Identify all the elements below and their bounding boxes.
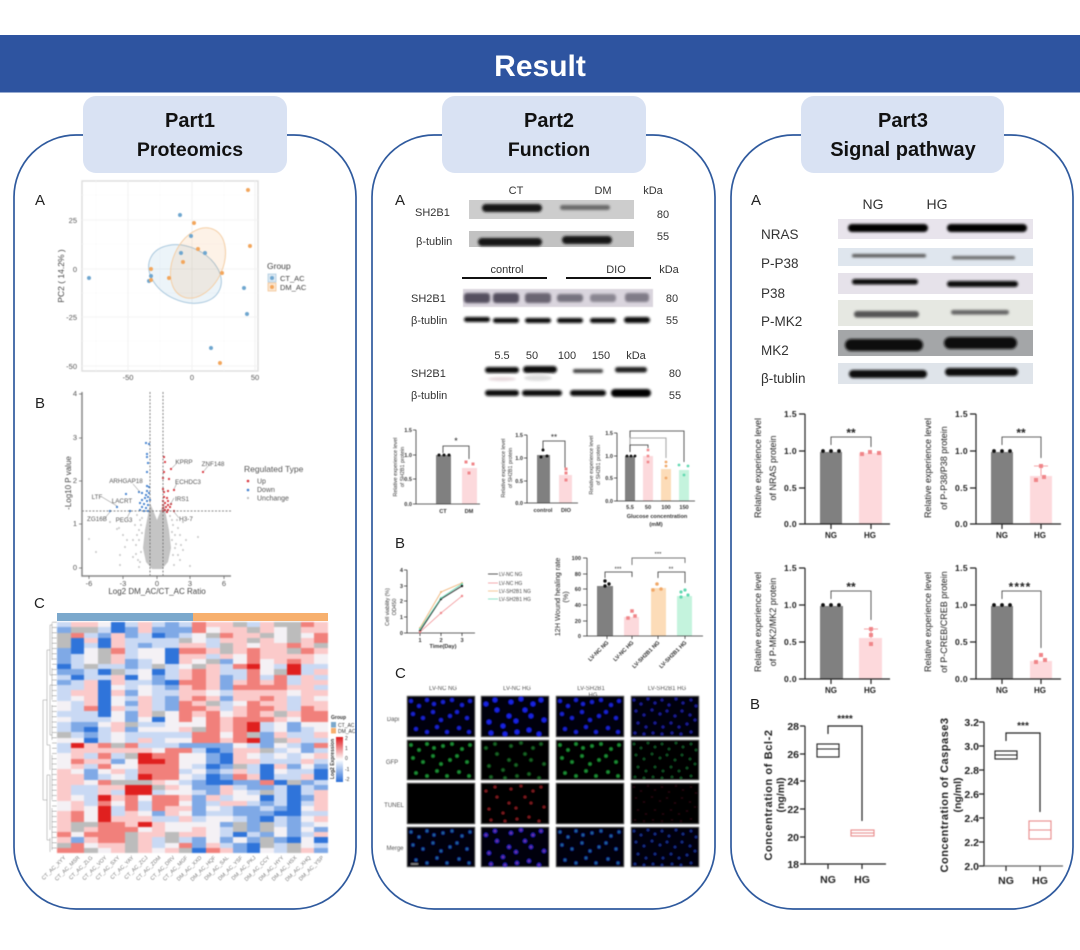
bar chart: SH2B1 glucose concentration: 0.0 [605,499,613,505]
label: Part1 A: A [35,192,45,209]
bar chart: wound healing rate: LV-NC NG [588,640,610,663]
heatmap sample labels: DM_AC_HQF [190,855,218,883]
line chart: cell viability: 2 [400,599,403,605]
heatmap sample labels: DM_AC_CCY [244,855,272,883]
box chart: Caspase3 concentration: 2.4 [964,813,979,825]
western blot: control vs DIO: 55 [666,315,678,327]
bar chart: P-P38/P38 protein: 1.0 [955,446,968,456]
bar chart: NRAS protein: of NRAS protein [768,435,778,501]
label: Part2 B: B [395,535,405,552]
bar chart: SH2B1 control vs DIO: 0.5 [515,479,523,485]
heatmap sample labels: CT_AC_DRV [150,855,177,882]
volcano plot: LACRT [112,498,132,505]
PCA scatter plot: PC2 ( 14.2% ) [56,249,66,303]
bar chart: P-P38/P38 protein: NG [996,531,1008,540]
western blots: pathway proteins: P-P38 [761,256,799,271]
bar chart: SH2B1 glucose concentration: 150 [679,505,689,511]
volcano plot: PEG3 [116,517,133,524]
title banner [0,35,1080,92]
bar chart: P-MK2/MK2 protein: NG [825,686,837,695]
fluorescence column labels: LV-NC HG [503,686,531,692]
western blots: pathway proteins [761,196,1033,386]
bar chart: SH2B1 CT vs DM: of SH2B1 protein [400,447,406,487]
box chart: Bcl-2 concentration: **** [837,714,853,725]
bar chart: wound healing rate: 0 [578,634,581,640]
heatmap sample labels: DM_AC_XHQ [284,855,312,883]
box chart: Bcl-2 concentration: 18 [787,859,799,871]
bar chart: SH2B1 glucose concentration: 1.0 [605,454,613,460]
heading: Part3 Signal pathway: Part3 [878,110,928,132]
label: Part1 C: C [34,595,45,612]
bar chart: wound healing rate: 40 [575,603,581,609]
bar chart: NRAS protein: 1.5 [784,409,797,419]
line chart: cell viability: 4 [400,568,404,574]
bar chart: P-MK2/MK2 protein: 1.0 [784,600,797,610]
bar chart: P-MK2/MK2 protein: HG [864,686,876,695]
bar chart: NRAS protein: 0.0 [784,519,797,529]
volcano plot: -6 [86,579,92,588]
bar chart: wound healing rate: ** [669,567,674,573]
western blot: control vs DIO: control [490,264,524,276]
box chart: Caspase3 concentration: 3.0 [964,741,979,753]
line chart: cell viability: 3 [400,584,403,590]
bar chart: P-MK2/MK2 protein: 0.0 [784,674,797,684]
bar chart: wound healing rate: LV-SH2B1 HG [659,640,688,670]
heatmap sample labels: CT_AC_XYY [41,855,68,882]
bar chart: P-P38/P38 protein: HG [1034,531,1046,540]
western blot: glucose gradient: 5.5 [494,350,510,362]
western blot: CT vs DM: CT [509,185,524,197]
western blot: glucose gradient: SH2B1 [411,368,446,380]
bar chart: SH2B1 control vs DIO: of SH2B1 protein [508,448,514,488]
western blots: pathway proteins: P38 [761,286,785,301]
bar chart: P-MK2/MK2 protein [753,563,890,695]
bar chart: NRAS protein: NG [825,531,837,540]
western blot: control vs DIO: kDa [659,264,680,276]
western blots: pathway proteins: NG [862,196,884,212]
box chart: Bcl-2 concentration: 28 [787,721,799,733]
line chart: cell viability: Cell viability (%) [385,588,391,626]
heading: Part2 Function: Function [508,139,590,161]
western blot: glucose gradient: kDa [626,350,647,362]
PCA scatter plot: Group [267,261,291,271]
heatmap cells [56,621,329,854]
volcano plot: LTF [92,494,103,501]
PCA scatter plot: -25 [66,313,77,322]
volcano plot: Unchange [257,496,289,502]
label: Part1 B: B [35,395,45,412]
bar chart: SH2B1 CT vs DM: CT [439,509,447,515]
box chart: Bcl-2 concentration: 24 [787,776,799,788]
fluorescence row labels: TUNEL [384,803,404,809]
bar chart: SH2B1 control vs DIO: control [534,508,553,514]
fluorescence row labels: GFP [386,760,398,766]
bar chart: wound healing rate: 12H Wound healing rate [553,558,562,636]
fluorescence column labels: LV-SH2B1 [577,686,605,692]
bar chart: SH2B1 CT vs DM: 0.5 [404,477,412,483]
western blots: pathway proteins: P-MK2 [761,314,802,329]
western blot: glucose gradient: 80 [669,368,681,380]
bar chart: P-MK2/MK2 protein: 1.5 [784,563,797,573]
bar chart: P-P38/P38 protein [923,409,1061,540]
bar chart: P-P38/P38 protein: 0.0 [955,519,968,529]
box chart: Caspase3 concentration: 2.2 [964,837,979,849]
heatmap sample labels [41,855,326,883]
bar chart: NRAS protein: HG [864,531,876,540]
bar chart: P-P38/P38 protein: 0.5 [955,483,968,493]
heatmap sample labels: CT_AC_YAY [109,855,136,881]
western blot: glucose gradient [411,350,681,402]
line chart: cell viability: LV-NC NG [499,572,522,578]
volcano plot: 3 [188,579,192,588]
volcano plot: ECHDC3 [175,479,201,486]
fluorescence column labels: LV-NC NG [429,686,457,692]
volcano plot: -Log10 P value [64,456,73,510]
bar chart: SH2B1 control vs DIO [501,433,578,514]
volcano plot [64,389,304,596]
bar chart: wound healing rate [553,552,703,670]
bar chart: NRAS protein: 0.5 [784,483,797,493]
bar chart: SH2B1 control vs DIO: Relative experience level [501,439,507,497]
bar chart: SH2B1 control vs DIO: DIO [561,508,572,514]
heatmap sample labels: DM_AC_HSX [271,855,299,883]
heatmap legend: 1 [345,746,348,752]
bar chart: SH2B1 glucose concentration [589,431,695,528]
heatmap sample labels: DM_AC_YSP [298,855,326,883]
volcano plot: 2 [73,476,77,485]
box chart: Bcl-2 concentration: (ng/ml) [775,778,787,812]
bar chart: SH2B1 CT vs DM: 1.0 [404,453,412,459]
western blot: glucose gradient: 50 [526,350,538,362]
bar chart: P-MK2/MK2 protein: 0.5 [784,637,797,647]
bar chart: wound healing rate: (%) [561,591,570,603]
fluorescence row labels: Dapi [387,717,399,723]
bar chart: P-CREB/CREB protein: 1.0 [955,600,968,610]
volcano plot: 0 [155,579,159,588]
fluorescence column labels: HG [588,693,598,699]
line chart: cell viability: Time(Day) [430,644,457,650]
heatmap legend: Group [331,715,346,721]
heatmap legend: -1 [345,767,350,773]
line chart: cell viability: LV-SH2B1 HG [499,597,531,603]
box chart: Bcl-2 concentration: Concentration of Bcl-2 [763,729,775,861]
panel: Part1 outline [14,135,356,909]
western blot: control vs DIO: DIO [606,264,626,276]
western blots: pathway proteins: HG [926,196,948,212]
bar chart: SH2B1 glucose concentration: (mM) [649,522,663,528]
volcano plot: 4 [73,389,77,398]
western blot: CT vs DM: DM [594,185,612,197]
heatmap sample labels: CT_AC_ZDM [135,855,163,882]
box chart: Bcl-2 concentration: NG [820,874,836,886]
volcano plot: Regulated Type [244,464,304,474]
bar chart: P-MK2/MK2 protein: ** [846,580,856,594]
bar chart: P-MK2/MK2 protein: of P-MK2/MK2 protein [768,578,778,666]
title banner: Result [494,50,586,83]
heatmap legend [330,715,356,783]
western blot: CT vs DM: β-tublin [416,236,452,248]
heatmap sample labels: CT_AC_MGF [162,855,190,883]
fluorescence row labels [384,717,404,852]
box chart: Bcl-2 concentration [763,714,886,886]
box chart: Caspase3 concentration: 2.6 [964,789,979,801]
label: Part3 B: B [750,696,760,713]
box chart: Bcl-2 concentration: HG [854,874,870,886]
PCA scatter plot [56,181,307,382]
volcano plot: Log2 DM_AC/CT_AC Ratio [108,587,206,596]
box chart: Bcl-2 concentration: 26 [787,749,799,761]
western blot: CT vs DM: 80 [657,209,669,221]
line chart: cell viability: 0 [400,631,403,637]
bar chart: SH2B1 glucose concentration: 100 [661,505,671,511]
heading: Part2 Function: Part2 [524,110,574,132]
western blot: control vs DIO [411,264,680,327]
PCA scatter plot: 25 [69,216,77,225]
bar chart: P-CREB/CREB protein: of P-CREB/CREB protein [939,571,949,673]
bar chart: NRAS protein: Relative experience level [753,418,763,518]
heatmap sample labels: CT_AC_SXY [95,855,122,882]
bar chart: SH2B1 control vs DIO: 1.5 [515,433,523,439]
volcano plot: IRS1 [175,496,189,503]
box chart: Caspase3 concentration: 3.2 [964,717,979,729]
heatmap sample labels: DM_AC_XXD [176,855,203,883]
heading: Part2 Function [442,96,646,173]
heading: Part1 Proteomics [83,96,287,173]
heatmap legend: 0 [345,756,348,762]
bar chart: SH2B1 CT vs DM: * [454,436,458,446]
bar chart: NRAS protein [753,409,890,540]
western blot: glucose gradient: β-tublin [411,390,447,402]
volcano plot: ARHGAP18 [109,478,143,485]
volcano plot: ZG16B [87,516,107,523]
bar chart: P-CREB/CREB protein: 1.5 [955,563,968,573]
bar chart: P-P38/P38 protein: of P-P38/P38 protein [939,426,949,510]
label: Part2 A: A [395,192,405,209]
panel: Part3 outline [731,135,1073,909]
western blot: CT vs DM: SH2B1 [415,207,450,219]
heatmap legend: Log2 Expression [330,739,336,779]
heatmap sample labels: CT_AC_MSR [54,855,81,883]
panel: Part2 outline [372,135,715,909]
heatmap legend: -2 [345,777,350,783]
line chart: cell viability: OD450 [392,599,398,615]
heatmap legend: DM_AC [338,729,356,735]
bar chart: wound healing rate: *** [654,552,662,558]
bar chart: P-P38/P38 protein: 1.5 [955,409,968,419]
bar chart: SH2B1 glucose concentration: 0.5 [605,476,613,482]
fluorescence row labels: Merge [386,846,404,852]
bar chart: SH2B1 glucose concentration: of SH2B1 protein [596,445,602,485]
heatmap sample labels: DM_AC_SAL [203,855,230,882]
heatmap sample labels: DM_AC_YSF [217,855,245,882]
western blot: control vs DIO: 80 [666,293,678,305]
western blots: pathway proteins: NRAS [761,227,799,242]
heading: Part3 Signal pathway [801,96,1004,173]
bar chart: P-MK2/MK2 protein: Relative experience level [753,572,763,672]
bar chart: wound healing rate: 20 [575,619,581,625]
box chart: Caspase3 concentration: (ng/ml) [952,778,964,812]
line chart: cell viability: LV-SH2B1 NG [499,589,531,595]
bar chart: wound healing rate: 100 [572,556,581,562]
box chart: Caspase3 concentration: *** [1017,721,1029,732]
volcano plot: H3-7 [179,516,193,523]
PCA scatter plot: 0 [190,373,194,382]
bar chart: P-CREB/CREB protein [923,563,1061,695]
line chart: cell viability: LV-NC HG [499,581,522,587]
fluorescence column labels: LV-SH2B1 HG [648,686,686,692]
heading: Part3 Signal pathway: Signal pathway [830,139,977,161]
PCA scatter plot: 50 [251,373,259,382]
western blot: glucose gradient: 100 [558,350,576,362]
fluorescence micrographs [407,696,699,867]
bar chart: SH2B1 glucose concentration: 1.5 [605,431,613,437]
box chart: Caspase3 concentration: 2.0 [964,861,979,873]
volcano plot: KPRP [175,459,193,466]
volcano plot: -3 [120,579,126,588]
western blot: CT vs DM: 55 [657,231,669,243]
bar chart: P-CREB/CREB protein: NG [996,686,1008,695]
volcano plot: Down [257,487,275,494]
bar chart: wound healing rate: 60 [575,587,581,593]
box chart: Bcl-2 concentration: 20 [787,832,799,844]
heatmap sample labels: DM_AC_PKJ [231,855,258,882]
bar chart: SH2B1 CT vs DM: Relative experience level [393,438,399,496]
bar chart: P-CREB/CREB protein: HG [1034,686,1046,695]
bar chart: SH2B1 control vs DIO: ** [551,433,557,442]
heatmap dendrogram [43,622,54,853]
label: Part2 C: C [395,665,406,682]
bar chart: P-CREB/CREB protein: 0.0 [955,674,968,684]
heatmap legend: CT_AC [338,723,355,729]
heading: Part1 Proteomics: Proteomics [137,139,243,161]
heatmap legend: 2 [345,736,348,742]
PCA scatter plot: DM_AC [280,283,307,292]
bar chart: P-CREB/CREB protein: 0.5 [955,637,968,647]
western blot: control vs DIO: β-tublin [411,315,447,327]
line chart: cell viability: 2 [439,638,443,644]
PCA scatter plot: -50 [123,373,133,382]
PCA scatter plot: 0 [73,265,77,274]
heatmap sample labels: CT_AC_ZLG [68,855,94,881]
bar chart: SH2B1 glucose concentration: Glucose concentration [627,514,688,520]
bar chart: SH2B1 CT vs DM: 1.5 [404,428,412,434]
western blots: pathway proteins: β-tublin [761,371,806,386]
bar chart: P-CREB/CREB protein: **** [1009,580,1031,594]
western blot: glucose gradient: 150 [592,350,610,362]
box chart: Bcl-2 concentration: 22 [787,804,799,816]
bar chart: P-CREB/CREB protein: Relative experience level [923,572,933,672]
bar chart: NRAS protein: ** [846,426,856,440]
box chart: Caspase3 concentration: HG [1032,875,1048,887]
bar chart: SH2B1 glucose concentration: Relative experience level [589,436,595,494]
line chart: cell viability [385,568,531,650]
heading: Part1 Proteomics: Part1 [165,110,215,132]
bar chart: SH2B1 glucose concentration: 5.5 [626,505,634,511]
western blot: glucose gradient: 55 [669,390,681,402]
fluorescence column labels [429,686,686,699]
bar chart: SH2B1 glucose concentration: 50 [645,505,651,511]
PCA scatter plot: CT_AC [280,274,305,283]
bar chart: wound healing rate: LV-NC HG [613,640,635,663]
western blots: pathway proteins: MK2 [761,343,789,358]
PCA scatter plot: -50 [66,362,77,371]
volcano plot: 0 [73,563,77,572]
western blot: CT vs DM [415,185,669,248]
western blot: control vs DIO: SH2B1 [411,293,446,305]
line chart: cell viability: 3 [460,638,464,644]
bar chart: wound healing rate: 80 [575,572,581,578]
bar chart: SH2B1 control vs DIO: 0.0 [515,501,523,507]
western blot: CT vs DM: kDa [643,185,664,197]
bar chart: wound healing rate: LV-SH2B1 NG [632,640,661,670]
bar chart: wound healing rate: *** [614,567,622,573]
bar chart: SH2B1 CT vs DM: 0.0 [404,502,412,508]
bar chart: NRAS protein: 1.0 [784,446,797,456]
bar chart: P-P38/P38 protein: ** [1016,426,1026,440]
heatmap group bar [57,613,328,621]
volcano plot: Up [257,478,266,486]
box chart: Caspase3 concentration: NG [998,875,1014,887]
heatmap sample labels: CT_AC_VOY [81,855,109,882]
volcano plot: ZNF148 [202,461,225,468]
heatmap sample labels: DM_AC_HYY [258,855,286,883]
bar chart: SH2B1 CT vs DM: DM [465,509,474,515]
volcano plot: 6 [222,579,226,588]
box chart: Caspase3 concentration: 2.8 [964,765,979,777]
volcano plot: 3 [73,433,77,442]
volcano plot: 1 [73,519,77,528]
bar chart: SH2B1 CT vs DM [393,428,480,515]
line chart: cell viability: 1 [400,615,403,621]
bar chart: P-P38/P38 protein: Relative experience level [923,418,933,518]
box chart: Caspase3 concentration: Concentration of Caspase3 [939,718,951,872]
box chart: Caspase3 concentration [939,717,1063,887]
heatmap sample labels: CT_AC_ZCJ [124,855,150,881]
line chart: cell viability: 1 [418,638,422,644]
label: Part3 A: A [751,192,761,209]
bar chart: SH2B1 control vs DIO: 1.0 [515,456,523,462]
